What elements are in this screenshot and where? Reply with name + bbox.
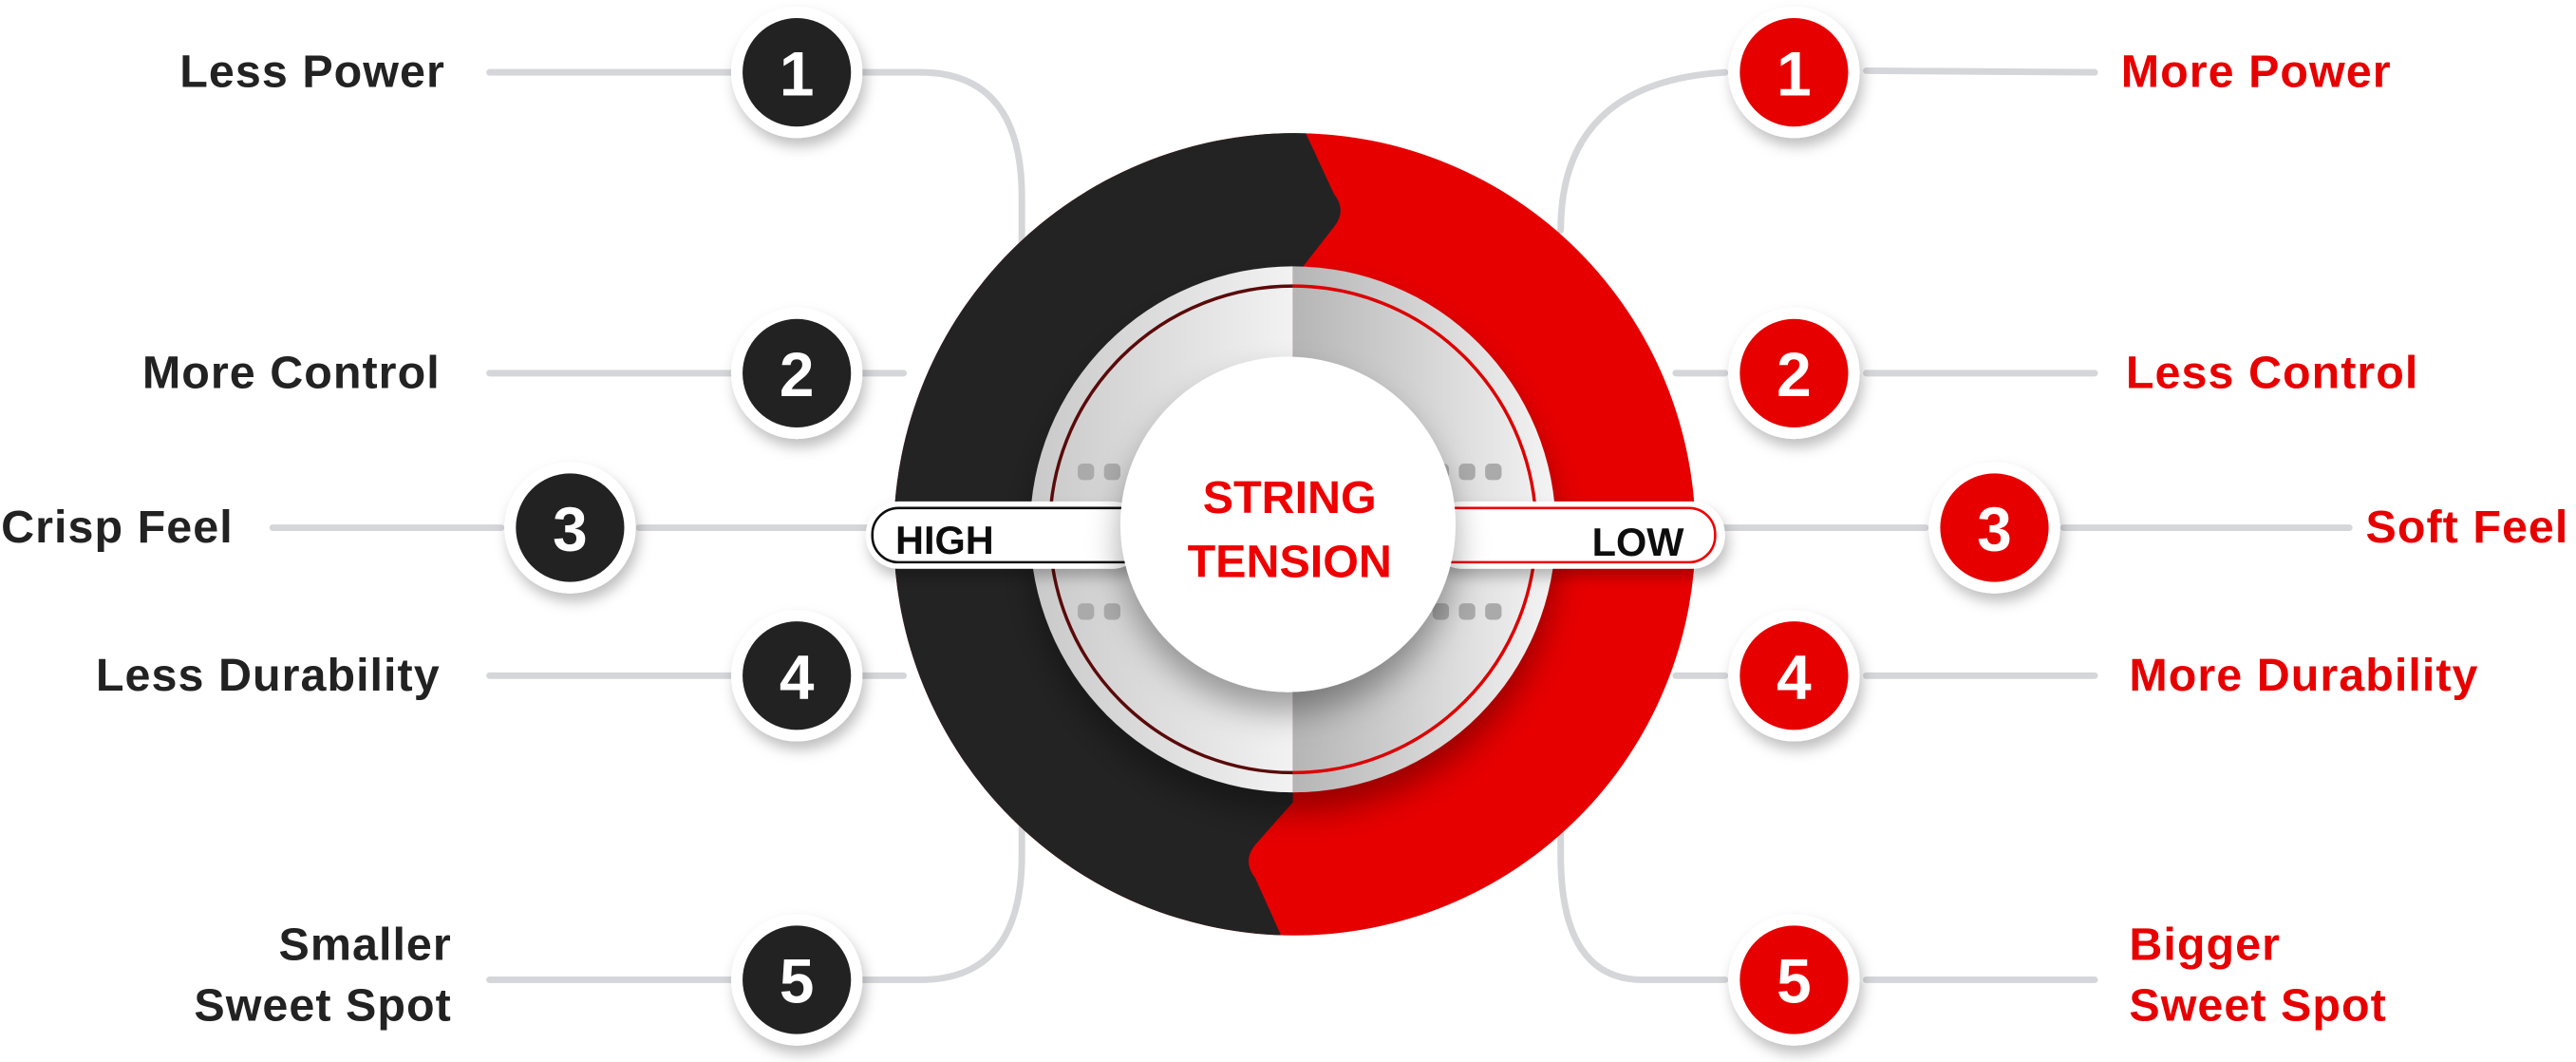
center white circle: [1120, 357, 1456, 692]
right labels: [2121, 47, 2568, 1032]
left numbered circles: 2: [780, 339, 814, 409]
left labels: Smaller: [279, 920, 452, 971]
right labels: More Power: [2121, 47, 2392, 98]
right numbered circles: 2: [1777, 339, 1812, 409]
right numbered circles: 1: [1777, 38, 1812, 108]
left labels: Crisp Feel: [1, 502, 234, 553]
left numbered circles: 4: [780, 642, 815, 712]
left numbered circles: 5: [780, 946, 814, 1016]
pill: HIGH: HIGH: [895, 518, 994, 562]
inner gray ring: [1030, 266, 1556, 792]
right numbered circles: [1728, 7, 2060, 1046]
left labels: Sweet Spot: [194, 980, 452, 1032]
left labels: More Control: [142, 347, 441, 398]
right numbered circles: 5: [1777, 946, 1812, 1016]
right numbered circles: 4: [1777, 642, 1812, 712]
title: STRING TENSION: TENSION: [1188, 536, 1392, 587]
right labels: More Durability: [2129, 650, 2478, 701]
left numbered circles: 3: [553, 494, 588, 564]
pill: LOW: LOW: [1592, 520, 1684, 564]
outer ring red: [893, 133, 1696, 936]
left labels: [1, 47, 452, 1032]
pill: HIGH: [866, 502, 1152, 569]
right labels: Sweet Spot: [2129, 980, 2387, 1032]
left labels: Less Power: [179, 47, 445, 98]
right numbered circles: 3: [1977, 494, 2012, 564]
connector lines: [273, 70, 2349, 979]
left labels: Less Durability: [96, 650, 441, 701]
right labels: Bigger: [2129, 920, 2281, 971]
right labels: Soft Feel: [2366, 502, 2568, 553]
outer ring black half: [894, 133, 1341, 935]
left numbered circles: 1: [780, 38, 814, 108]
left numbered circles: [504, 7, 862, 1046]
right labels: Less Control: [2126, 347, 2418, 398]
pill: LOW: [1422, 502, 1725, 569]
dial: string tension: [862, 133, 1736, 936]
title: STRING TENSION: STRING: [1203, 472, 1377, 523]
dots: [1078, 464, 1501, 619]
